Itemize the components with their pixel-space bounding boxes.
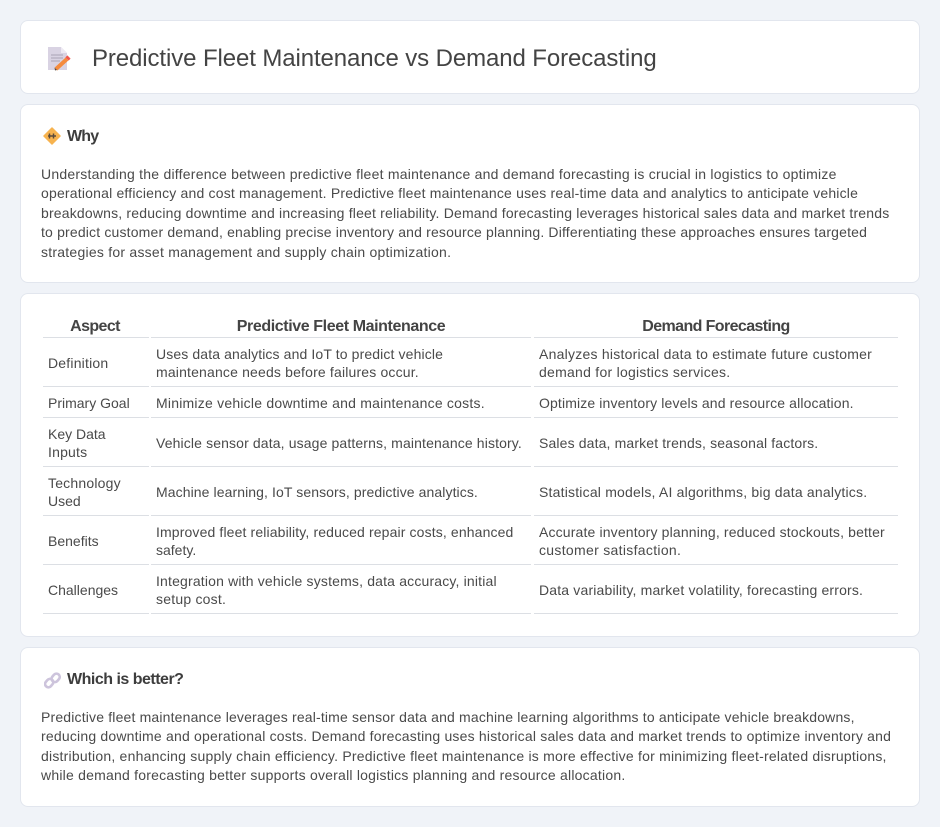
table header: Aspect [70, 318, 120, 335]
why paragraph: breakdowns, reducing downtime and increasing fleet reliability. Demand forecasting leverages historical sales data and market trends [41, 205, 889, 221]
row: primary goal: Minimize vehicle downtime and maintenance costs. [156, 395, 485, 411]
row: technology used: Machine learning, IoT sensors, predictive analytics. [156, 484, 478, 500]
row: definition: maintenance needs before failures occur. [156, 364, 419, 380]
why paragraph: to predict customer demand, enabling precise inventory and resource planning. Differentiating these approaches ensures targeted [41, 224, 867, 240]
row: technology used [48, 475, 867, 509]
row: technology used: Statistical models, AI algorithms, big data analytics. [539, 484, 867, 500]
row: technology used: Used [48, 493, 81, 509]
row: challenges: Integration with vehicle systems, data accuracy, initial [156, 573, 497, 589]
which is better paragraph: Predictive fleet maintenance leverages real-time sensor data and machine learning algorithms to anticipate vehicle breakdowns, [41, 709, 855, 725]
row: benefits: customer satisfaction. [539, 542, 681, 558]
row: key data inputs [48, 426, 818, 460]
panel: comparison table [20, 293, 920, 637]
heading: why: Why [67, 128, 98, 145]
row: challenges: Data variability, market volatility, forecasting errors. [539, 582, 863, 598]
heading: which is better: Which is better? [67, 671, 183, 688]
table header [70, 318, 790, 335]
row: benefits [48, 524, 885, 558]
row: benefits: Improved fleet reliability, reduced repair costs, enhanced [156, 524, 513, 540]
why paragraph [41, 166, 889, 260]
which is better paragraph: reducing downtime and operational costs. Demand forecasting uses historical sales data and market trends to optimize inventory and [41, 728, 891, 744]
title: Predictive Fleet Maintenance vs Demand Forecasting [92, 45, 657, 72]
row: primary goal: Primary Goal [48, 395, 130, 411]
row: key data inputs: Vehicle sensor data, usage patterns, maintenance history. [156, 435, 522, 451]
why paragraph: operational efficiency and cost management. Predictive fleet maintenance uses real-time data and analytics to anticipate vehicle [41, 185, 858, 201]
row: key data inputs: Inputs [48, 444, 87, 460]
row: definition [48, 346, 872, 380]
row: definition: Definition [48, 355, 108, 371]
row: benefits: Accurate inventory planning, reduced stockouts, better [539, 524, 885, 540]
panel: which is better [20, 647, 920, 807]
why paragraph: Understanding the difference between predictive fleet maintenance and demand forecasting is crucial in logistics to optimize [41, 166, 837, 182]
row: challenges: Challenges [48, 582, 118, 598]
which is better paragraph: distribution, enhancing supply chain efficiency. Predictive fleet maintenance is more effective for minimizing fleet-related disruptions, [41, 748, 887, 764]
row: challenges [48, 573, 863, 607]
row: key data inputs: Key Data [48, 426, 106, 442]
panel: title header [20, 20, 920, 94]
icon: document with pencil [48, 47, 70, 70]
why paragraph: strategies for asset management and supply chain optimization. [41, 244, 451, 260]
row: technology used: Technology [48, 475, 121, 491]
row: definition: Analyzes historical data to estimate future customer [539, 346, 872, 362]
row: benefits: Benefits [48, 533, 99, 549]
which is better paragraph: while demand forecasting better supports overall logistics planning and resource allocation. [41, 767, 625, 783]
table header: Predictive Fleet Maintenance [237, 318, 445, 335]
which is better paragraph [41, 709, 891, 783]
icon: warning diamond [43, 127, 61, 145]
table header: Demand Forecasting [642, 318, 790, 335]
row: primary goal [48, 395, 854, 411]
row: challenges: setup cost. [156, 591, 226, 607]
row: definition: Uses data analytics and IoT to predict vehicle [156, 346, 443, 362]
row: key data inputs: Sales data, market trends, seasonal factors. [539, 435, 818, 451]
panel: why [20, 104, 920, 283]
row: primary goal: Optimize inventory levels and resource allocation. [539, 395, 854, 411]
row: benefits: safety. [156, 542, 196, 558]
icon: chain link [44, 672, 61, 689]
row: definition: demand for logistics services. [539, 364, 730, 380]
